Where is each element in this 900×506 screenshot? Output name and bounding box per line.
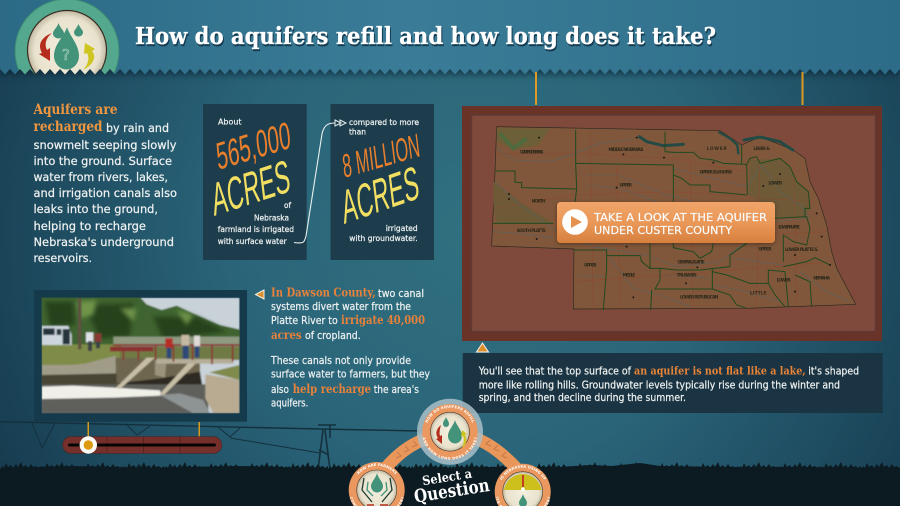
map of Nebraska: UPPER ELKHORN xyxy=(699,169,732,175)
panel: Nebraska map xyxy=(462,106,882,341)
panel: surface water acres xyxy=(203,104,307,260)
intro paragraph: by rain and xyxy=(106,121,169,135)
intro paragraph: helping to recharge xyxy=(34,219,146,233)
text block: Dawson County: In Dawson County, xyxy=(271,286,376,300)
panel: surface water acres: Nebraska xyxy=(254,214,289,222)
panel: surface water acres: with surface water xyxy=(218,237,288,246)
question selector xyxy=(348,398,551,506)
map of Nebraska: LOWER PLATTE S. xyxy=(785,247,819,253)
text block: Dawson County: help recharge xyxy=(293,382,371,396)
text block: Dawson County: irrigate 40,000 xyxy=(341,313,425,327)
map of Nebraska: TRI-BASIN xyxy=(677,272,697,278)
panel: map caption xyxy=(463,353,883,413)
panel: map caption: it's shaped xyxy=(808,365,859,377)
title: How do aquifers refill and how long does it take? xyxy=(135,23,716,50)
number: 565,000: 565,000 xyxy=(214,114,293,179)
map of Nebraska: UPPER xyxy=(758,246,772,252)
map of Nebraska: LOWER xyxy=(777,278,791,284)
question: aquifers refill: AND HOW LONG DOES IT TAKE? xyxy=(422,437,478,460)
map of Nebraska: NEMAHA xyxy=(813,275,831,281)
map of Nebraska: NORTH xyxy=(532,199,546,205)
panel: surface water acres: ACRES xyxy=(209,150,293,226)
map of Nebraska xyxy=(492,127,856,310)
question: supply gauge xyxy=(494,464,551,506)
photo: canal headgate xyxy=(38,294,243,413)
panel: surface water acres: farmland is irrigated xyxy=(218,225,294,234)
hanging straps for map xyxy=(535,72,804,105)
intro paragraph: Nebraska's underground xyxy=(34,235,174,249)
map of Nebraska: LOWER PLATTE xyxy=(778,224,800,230)
intro paragraph: water from rivers, lakes, xyxy=(34,170,168,184)
text block: Dawson County xyxy=(270,286,430,410)
map of Nebraska: LOWER xyxy=(707,146,727,152)
map of Nebraska: LOWER xyxy=(768,180,783,186)
arrow: connector between panels xyxy=(294,120,346,243)
panel: map caption: You'll see that the top surface of xyxy=(478,365,631,377)
map of Nebraska: MIDDLE NIOBRARA xyxy=(608,147,644,153)
question: farmers xyxy=(348,462,405,506)
map of Nebraska: UPPER NIOBRARA xyxy=(520,149,544,155)
map of Nebraska: CENTRAL PLATTE xyxy=(677,260,705,266)
field silhouette xyxy=(0,460,900,506)
button: take a look: UNDER CUSTER COUNTY xyxy=(594,225,733,237)
panel: canal photo xyxy=(34,290,247,422)
icon: photo pointer xyxy=(256,290,264,299)
map of Nebraska: UPPER xyxy=(584,263,597,269)
question: aquifers refill xyxy=(417,398,483,465)
panel: groundwater acres xyxy=(330,104,434,260)
panel: map caption: more like rolling hills. Groundwater levels typically rise during the winter and xyxy=(479,379,840,391)
icon: aquifer badge: ? xyxy=(62,46,70,64)
button: take a look xyxy=(557,202,775,243)
panel: groundwater acres: than xyxy=(349,128,366,137)
intro paragraph: leaks into the ground, xyxy=(34,202,158,216)
question: farmers: HOW ARE FARMERS xyxy=(356,463,397,474)
intro paragraph: into the ground. Surface xyxy=(34,154,172,168)
panel: groundwater acres: ACRES xyxy=(339,156,422,235)
label: select a question: Select a xyxy=(421,466,473,488)
header banner xyxy=(0,0,900,78)
panel: groundwater acres: with groundwater. xyxy=(349,234,418,243)
panel: map caption: an aquifer is not flat like a lake, xyxy=(634,363,806,377)
text block: Dawson County: two canal xyxy=(378,288,424,300)
text block: Dawson County: the area's xyxy=(374,384,419,396)
panel: surface water acres: About xyxy=(218,118,242,126)
map of Nebraska: MIDDLE xyxy=(623,273,635,279)
intro paragraph: Aquifers are xyxy=(33,102,118,118)
map of Nebraska: LITTLE xyxy=(750,290,767,296)
intro paragraph: snowmelt seeping slowly xyxy=(34,138,177,152)
panel: surface water acres: of xyxy=(284,201,291,210)
intro paragraph: reservoirs. xyxy=(34,251,92,265)
text block: Dawson County: surface water to farmers, but they xyxy=(271,368,430,380)
irrigation pivot silhouette xyxy=(0,422,420,470)
panel: groundwater acres: compared to more xyxy=(349,118,419,127)
arc connector xyxy=(384,434,518,470)
icon: aquifer badge xyxy=(14,0,120,74)
question: aquifers refill: HOW DO AQUIFERS REFILL xyxy=(425,405,474,423)
text block: Dawson County: These canals not only provide xyxy=(270,355,411,367)
number: 8 million: 8 MILLION xyxy=(340,127,422,186)
label: select a question xyxy=(411,463,491,506)
map of Nebraska: LEWIS & xyxy=(753,146,770,152)
button: take a look: TAKE A LOOK AT THE AQUIFER xyxy=(593,212,768,224)
question: supply gauge: IS NEBRASKA USING UP xyxy=(500,465,546,480)
slider xyxy=(63,422,222,454)
map of Nebraska: SOUTH PLATTE xyxy=(517,228,546,234)
intro paragraph: and irrigation canals also xyxy=(34,186,177,200)
text block: Dawson County: aquifers. xyxy=(271,398,308,410)
icon: caption pointer xyxy=(476,343,488,352)
intro paragraph xyxy=(33,102,177,265)
text block: Dawson County: of cropland. xyxy=(305,330,361,342)
text block: Dawson County: Platte River to xyxy=(271,315,338,327)
panel: map caption: spring, and then decline during the summer. xyxy=(479,392,686,404)
map of Nebraska: UPPER xyxy=(619,183,633,189)
text block: Dawson County: acres xyxy=(271,328,302,342)
intro paragraph: recharged xyxy=(34,119,103,135)
text block: Dawson County: also xyxy=(271,384,289,396)
map of Nebraska: LOWER REPUBLICAN xyxy=(680,294,719,300)
panel: groundwater acres: irrigated xyxy=(386,224,418,233)
text block: Dawson County: systems divert water from the xyxy=(271,301,411,313)
